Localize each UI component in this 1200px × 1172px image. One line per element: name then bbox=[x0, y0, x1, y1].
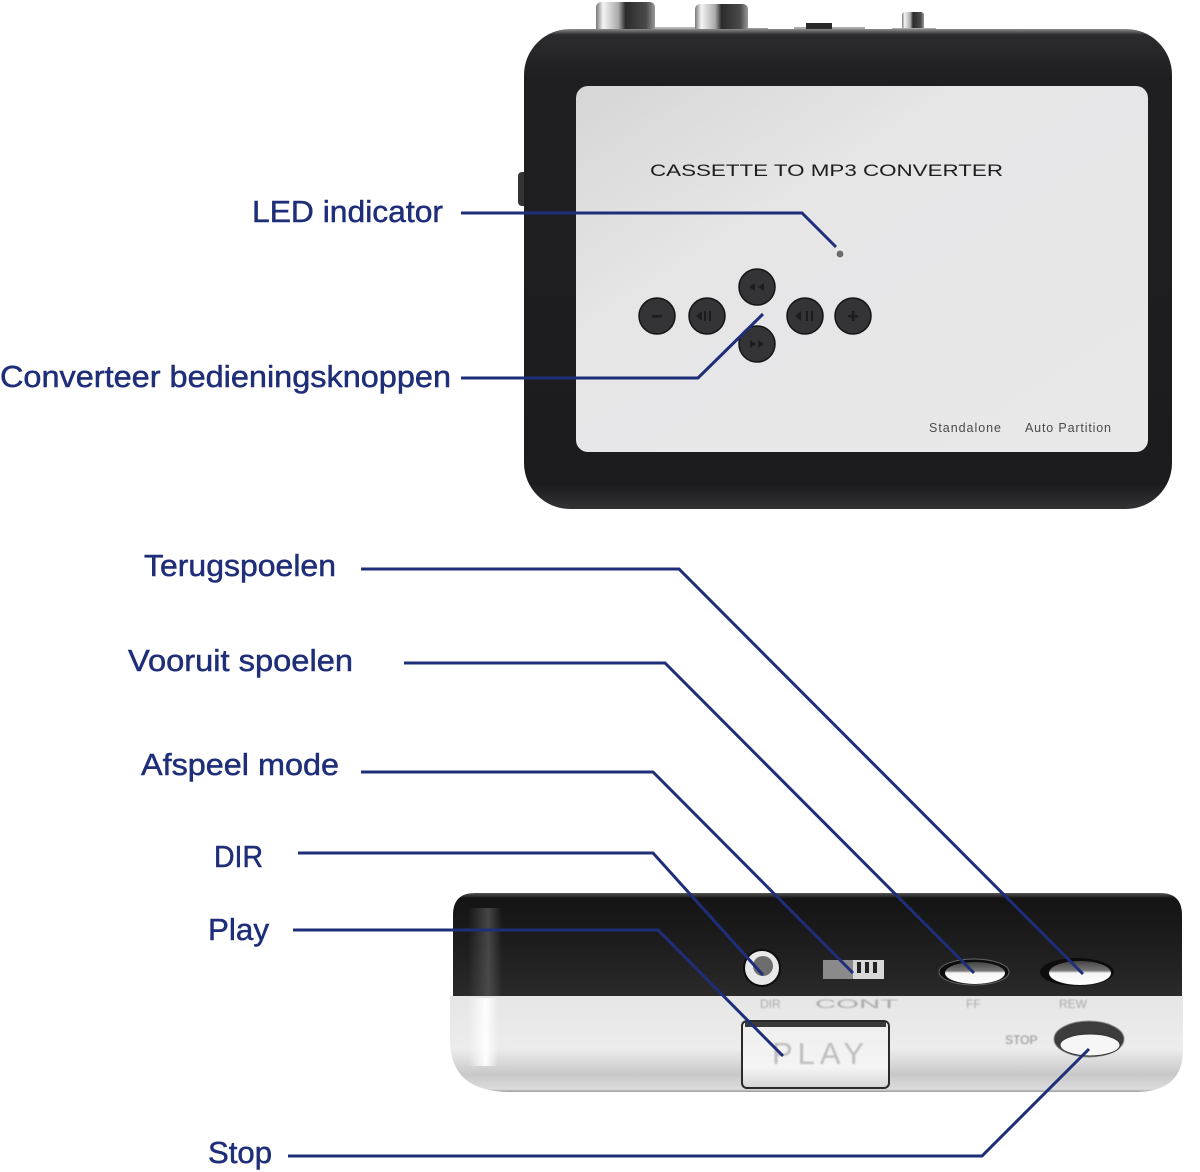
engraved labels: CONT bbox=[815, 997, 900, 1011]
label: LED indicator bbox=[252, 194, 836, 247]
label: Terugspoelen: Terugspoelen bbox=[144, 548, 336, 583]
faceplate title: CASSETTE TO MP3 CONVERTER bbox=[650, 161, 1003, 180]
black upper body bbox=[453, 893, 1182, 996]
label: Play bbox=[208, 912, 783, 1056]
device: side view bbox=[450, 893, 1183, 1092]
mode switch bbox=[823, 960, 884, 979]
label: Terugspoelen bbox=[144, 548, 1083, 974]
faceplate caption: auto partition: Auto Partition bbox=[1025, 421, 1111, 435]
silver lower body bbox=[450, 996, 1183, 1092]
stop button bbox=[1054, 1021, 1124, 1057]
label: Afspeel mode bbox=[141, 747, 853, 973]
engraved labels: REW bbox=[1059, 997, 1088, 1011]
engraved labels: FF bbox=[966, 997, 981, 1011]
label: Play: Play bbox=[208, 912, 269, 947]
LED bbox=[836, 250, 844, 258]
engraved labels bbox=[760, 997, 1088, 1047]
silver faceplate bbox=[576, 86, 1148, 452]
black body bbox=[524, 29, 1172, 509]
engraved labels: DIR bbox=[760, 997, 781, 1011]
control buttons bbox=[639, 269, 871, 362]
label: Vooruit spoelen: Vooruit spoelen bbox=[128, 643, 353, 678]
REW button bbox=[1040, 958, 1114, 986]
engraved labels: STOP bbox=[1005, 1033, 1037, 1047]
label: Stop: Stop bbox=[208, 1135, 272, 1170]
FF button bbox=[939, 959, 1009, 985]
faceplate caption: standalone: Standalone bbox=[929, 421, 1001, 435]
label: Converteer bedieningsknoppen bbox=[0, 314, 763, 394]
label: Afspeel mode: Afspeel mode bbox=[141, 747, 339, 782]
device: top view bbox=[518, 2, 1172, 509]
side dial bbox=[518, 172, 528, 206]
label: Vooruit spoelen bbox=[128, 643, 974, 973]
label: Converteer bedieningsknoppen: Converteer bedieningsknoppen bbox=[0, 359, 451, 394]
play button: PLAY bbox=[772, 1036, 864, 1071]
label: DIR bbox=[214, 839, 763, 975]
label: LED indicator: LED indicator bbox=[252, 194, 443, 229]
play button bbox=[742, 1021, 889, 1088]
label: DIR: DIR bbox=[214, 839, 263, 874]
label: Stop bbox=[208, 1049, 1089, 1170]
connectors on top edge bbox=[596, 2, 936, 36]
DIR switch bbox=[744, 950, 780, 986]
corner highlights bbox=[468, 908, 502, 996]
